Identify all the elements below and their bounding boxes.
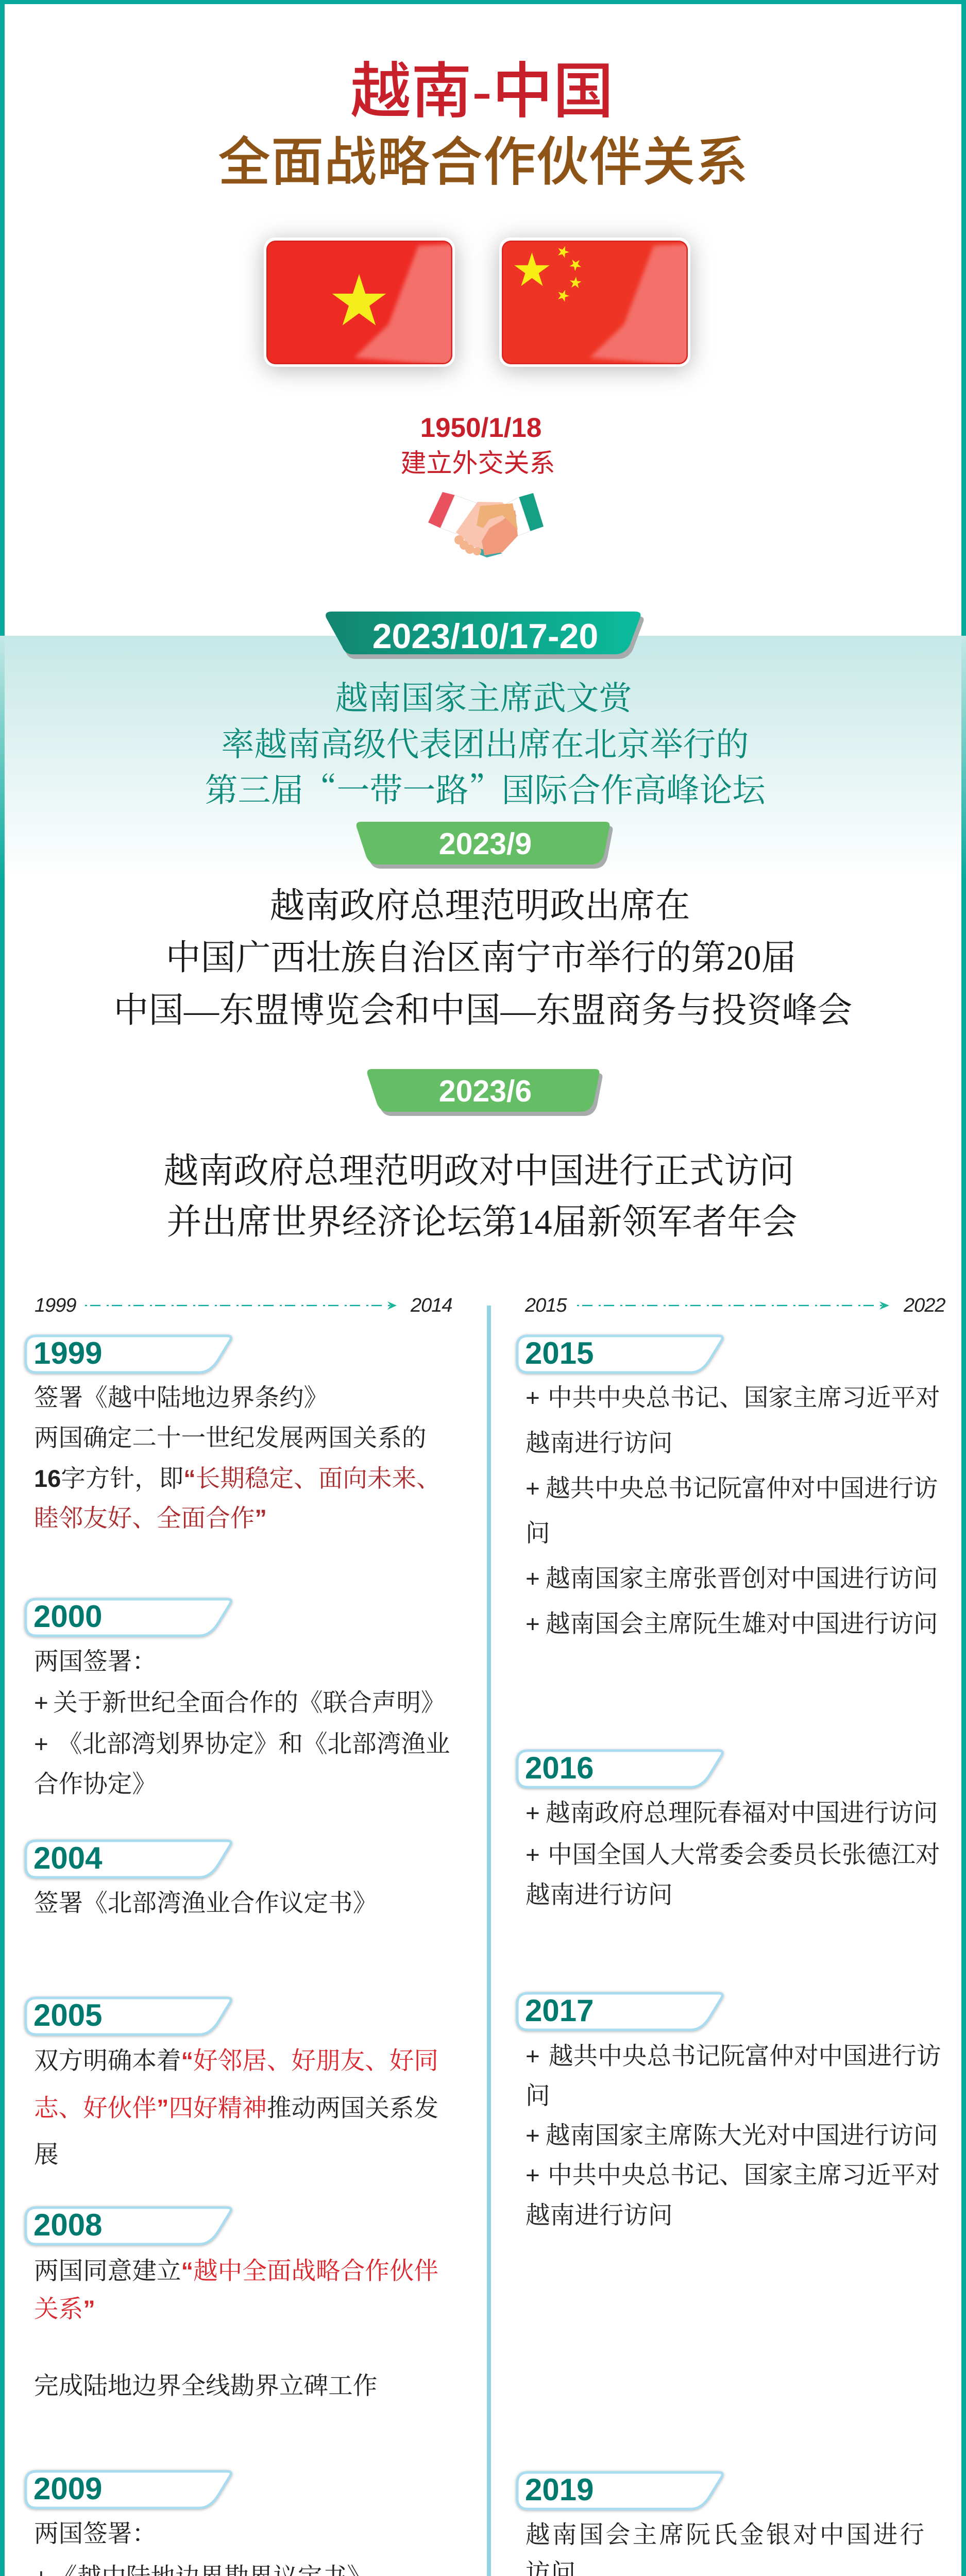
year tab — [516, 2471, 724, 2511]
axis end: 2014: 2014 — [411, 1295, 452, 1316]
year label: 2000 — [33, 1599, 102, 1634]
event text: + — [526, 1841, 540, 1869]
line 1: 越南政府总理范明政对中国进行正式访问 — [163, 1151, 794, 1191]
year tab — [23, 1597, 234, 1639]
axis start: 1999: 1999 — [35, 1295, 76, 1316]
year label: 2009 — [33, 2471, 102, 2506]
event text — [526, 2511, 948, 2576]
event text: 签署《北部湾渔业合作议定书》 — [34, 1890, 377, 1917]
event text — [34, 1648, 450, 1798]
badge: 2023/10/17-20: 2023/10/17-20 — [372, 617, 598, 656]
event text: + — [526, 1611, 540, 1638]
year tab — [24, 2470, 232, 2510]
event text: 志、好伙伴”四好精神推动两国关系发 — [34, 2094, 438, 2122]
axis start: 2015: 2015 — [525, 1295, 567, 1316]
event text: 越南国会主席阮氏金银对中国进行 — [526, 2521, 926, 2549]
panel: 2017 — [516, 1992, 948, 2231]
event text: 合作协定》 — [34, 1771, 157, 1798]
event text: 关系” — [34, 2295, 95, 2323]
year label: 2019 — [525, 2472, 594, 2507]
line 3: 中国—东盟博览会和中国—东盟商务与投资峰会 — [113, 991, 853, 1030]
line 3: 第三届“一带一路”国际合作高峰论坛 — [205, 764, 766, 811]
event text: + — [34, 1731, 48, 1758]
panel: 2005 — [23, 1995, 438, 2168]
event text: 越共中央总书记阮富仲对中国进行访 — [546, 1475, 938, 1502]
event text — [34, 2047, 438, 2168]
year tab — [23, 1838, 234, 1881]
event text: 中共中央总书记、国家主席习近平对 — [548, 1384, 940, 1412]
diplomatic relations caption: 建立外交关系 — [401, 449, 555, 478]
event text: 越南进行访问 — [526, 1882, 673, 1909]
year label: 2008 — [33, 2208, 102, 2242]
event text — [526, 1374, 948, 1639]
panel: 2009 — [24, 2470, 457, 2576]
event text: 16字方针，即“长期稳定、面向未来、 — [34, 1465, 441, 1493]
event text: 双方明确本着“好邻居、好朋友、好同 — [34, 2047, 438, 2075]
arrow: 2015 to 2022 — [577, 1301, 889, 1310]
event text: 签署《越中陆地边界条约》 — [34, 1384, 328, 1412]
title — [217, 58, 748, 192]
event text: 越南国会主席阮生雄对中国进行访问 — [546, 1611, 938, 1638]
event text: 两国确定二十一世纪发展两国关系的 — [34, 1425, 427, 1452]
line 1: 越南政府总理范明政出席在 — [269, 886, 690, 925]
panel: 2016 — [516, 1749, 948, 1910]
event text: 展 — [34, 2141, 59, 2168]
event text: + — [34, 1689, 48, 1717]
title line 1: 越南-中国 — [350, 58, 614, 126]
year tab — [516, 1334, 724, 1374]
text: Belt and Road forum — [205, 672, 766, 811]
year label: 2016 — [525, 1751, 594, 1785]
event text: 《北部湾划界协定》和《北部湾渔业 — [58, 1731, 450, 1758]
event text: 完成陆地边界全线勘界立碑工作 — [34, 2372, 377, 2400]
event text: 越南国家主席陈大光对中国进行访问 — [546, 2122, 938, 2149]
line 2: 率越南高级代表团出席在北京举行的 — [222, 718, 749, 766]
arrow: 1999 to 2014 — [85, 1301, 397, 1310]
axis end: 2022: 2022 — [904, 1295, 945, 1316]
badge: 2023/6: 2023/6 — [439, 1074, 532, 1108]
line 2: 并出席世界经济论坛第14届新领军者年会 — [166, 1202, 798, 1242]
event text — [526, 1789, 948, 1910]
icon: handshake — [428, 492, 544, 557]
event text: 越南国家主席张晋创对中国进行访问 — [546, 1565, 938, 1592]
event text: 问 — [526, 1520, 550, 1547]
year label: 2004 — [33, 1841, 102, 1875]
year label: 1999 — [33, 1336, 102, 1370]
year tab — [23, 1995, 234, 2038]
year label: 2005 — [33, 1998, 102, 2032]
event text: 关于新世纪全面合作的《联合声明》 — [53, 1689, 446, 1717]
event text: + — [526, 2122, 540, 2149]
event text — [34, 2246, 457, 2401]
panel: 2015 — [516, 1334, 948, 1639]
panel: 2000 — [23, 1597, 450, 1798]
event text: 越南进行访问 — [526, 1430, 673, 1457]
event text: 中共中央总书记、国家主席习近平对 — [548, 2162, 940, 2189]
badge: 2023/10/17-20 — [326, 612, 644, 659]
event text: 两国签署： — [34, 2520, 157, 2548]
event text: + — [526, 1384, 540, 1412]
flag: Vietnam — [251, 228, 468, 383]
line 1: 越南国家主席武文赏 — [335, 672, 632, 719]
event text — [34, 1384, 441, 1532]
event text: + — [526, 2043, 540, 2070]
year tab — [23, 1333, 234, 1376]
panel: 1999 — [23, 1333, 441, 1532]
title line 2: 全面战略合作伙伴关系 — [217, 132, 748, 192]
badge: 2023/9 — [357, 822, 613, 869]
event text: 两国签署： — [34, 1648, 157, 1675]
event text: + — [526, 1800, 540, 1827]
year tab — [516, 1992, 724, 2031]
event text — [526, 2031, 948, 2231]
event text: 越南进行访问 — [526, 2202, 673, 2229]
text: official visit and WEF — [163, 1151, 798, 1242]
panel: 2008 — [24, 2206, 457, 2401]
event text: 越南政府总理阮春福对中国进行访问 — [546, 1800, 938, 1827]
event text — [34, 2510, 457, 2576]
event text: 中国全国人大常委会委员长张德江对 — [548, 1841, 940, 1869]
diplomatic relations date: 1950/1/18 — [420, 413, 541, 443]
year label: 2017 — [525, 1993, 594, 2028]
event text: + — [526, 1475, 540, 1502]
panel: 2019 — [516, 2471, 948, 2576]
event text: + — [526, 1565, 540, 1592]
panel: 2004 — [23, 1838, 377, 1917]
event text: 问 — [526, 2082, 550, 2110]
text: ASEAN expo — [113, 886, 853, 1030]
event text: 睦邻友好、全面合作” — [34, 1504, 267, 1532]
year tab — [516, 1749, 724, 1789]
badge: 2023/6 — [367, 1069, 603, 1116]
year tab — [24, 2206, 232, 2246]
event text: + — [526, 2162, 540, 2189]
line 2: 中国广西壮族自治区南宁市举行的第20届 — [165, 938, 796, 977]
flag: China — [486, 228, 703, 383]
event text: 越共中央总书记阮富仲对中国进行访 — [549, 2043, 941, 2070]
badge: 2023/9: 2023/9 — [439, 827, 532, 861]
year label: 2015 — [525, 1336, 594, 1370]
event text: 两国同意建立“越中全面战略合作伙伴 — [34, 2257, 438, 2285]
